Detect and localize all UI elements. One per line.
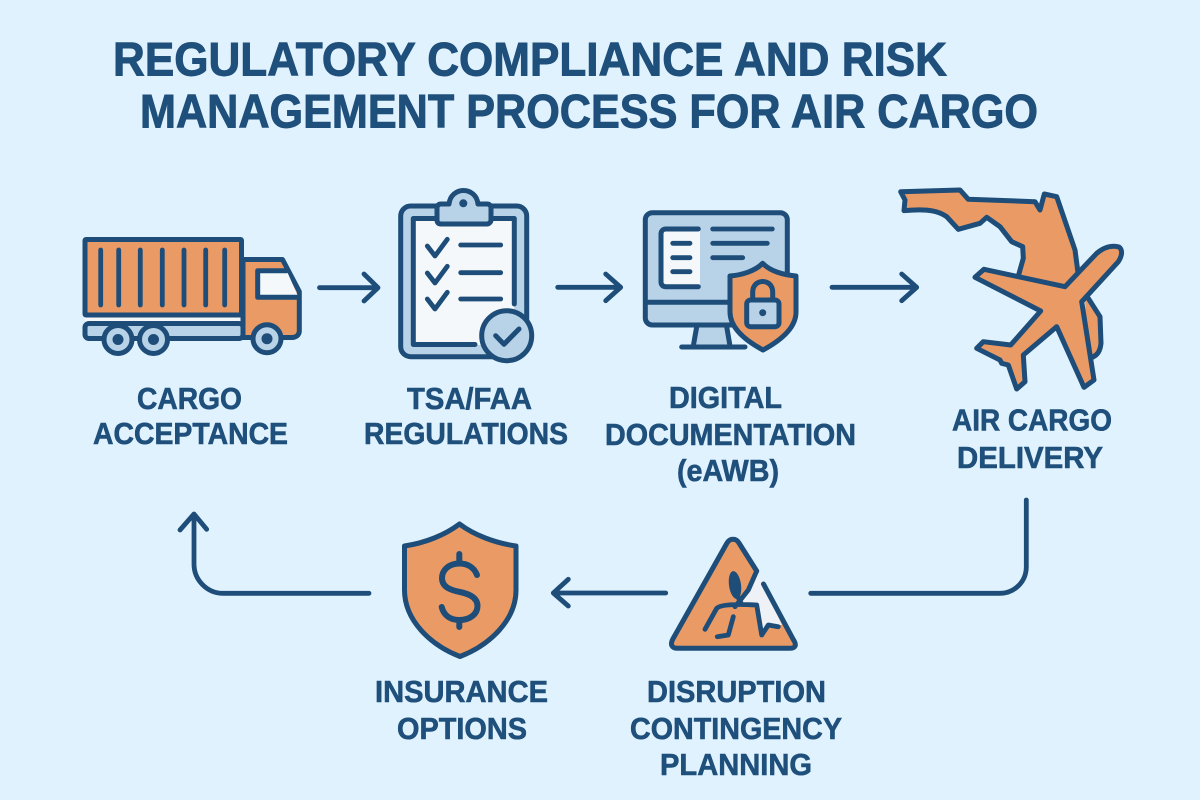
label: digital documentation bbox=[605, 380, 856, 488]
icon: cargo truck bbox=[85, 240, 299, 354]
arrow: delivery to disruption planning bbox=[811, 500, 1026, 593]
label: TSA/FAA regulations: TSA/FAA bbox=[407, 381, 532, 416]
label: disruption contingency planning: DISRUPTION bbox=[647, 674, 826, 709]
title bbox=[113, 32, 1038, 138]
label: cargo acceptance bbox=[93, 381, 288, 451]
label: air cargo delivery: AIR CARGO bbox=[952, 402, 1112, 438]
icon: insurance shield with dollar sign bbox=[404, 524, 516, 656]
icon: Florida map with airplane bbox=[901, 190, 1122, 389]
label: air cargo delivery: DELIVERY bbox=[957, 440, 1103, 475]
label: cargo acceptance: CARGO bbox=[137, 381, 242, 416]
arrow: disruption planning to insurance bbox=[553, 579, 666, 606]
label: digital documentation: (eAWB) bbox=[677, 453, 779, 488]
label: digital documentation: DOCUMENTATION bbox=[605, 417, 856, 452]
icon: secure computer monitor bbox=[645, 213, 796, 350]
arrow: monitor to plane bbox=[832, 274, 917, 301]
label: insurance options: INSURANCE bbox=[375, 674, 548, 709]
label: TSA/FAA regulations: REGULATIONS bbox=[364, 416, 568, 451]
label: TSA/FAA regulations bbox=[364, 381, 568, 451]
arrow: clipboard to monitor bbox=[558, 274, 621, 301]
label: cargo acceptance: ACCEPTANCE bbox=[93, 416, 288, 451]
label: disruption contingency planning bbox=[630, 674, 842, 782]
label: air cargo delivery bbox=[952, 402, 1112, 475]
arrow: insurance back to cargo acceptance bbox=[180, 514, 369, 593]
label: disruption contingency planning: PLANNING bbox=[660, 747, 812, 782]
label: digital documentation: DIGITAL bbox=[669, 380, 782, 415]
icon: disruption warning triangle bbox=[671, 539, 795, 648]
label: disruption contingency planning: CONTINGENCY bbox=[630, 711, 842, 746]
label: insurance options: OPTIONS bbox=[397, 711, 527, 746]
title: REGULATORY COMPLIANCE AND RISK bbox=[113, 32, 947, 86]
icon: clipboard checklist bbox=[401, 190, 532, 361]
title: MANAGEMENT PROCESS FOR AIR CARGO bbox=[140, 84, 1038, 138]
label: insurance options bbox=[375, 674, 548, 746]
arrow: truck to clipboard bbox=[320, 274, 378, 301]
